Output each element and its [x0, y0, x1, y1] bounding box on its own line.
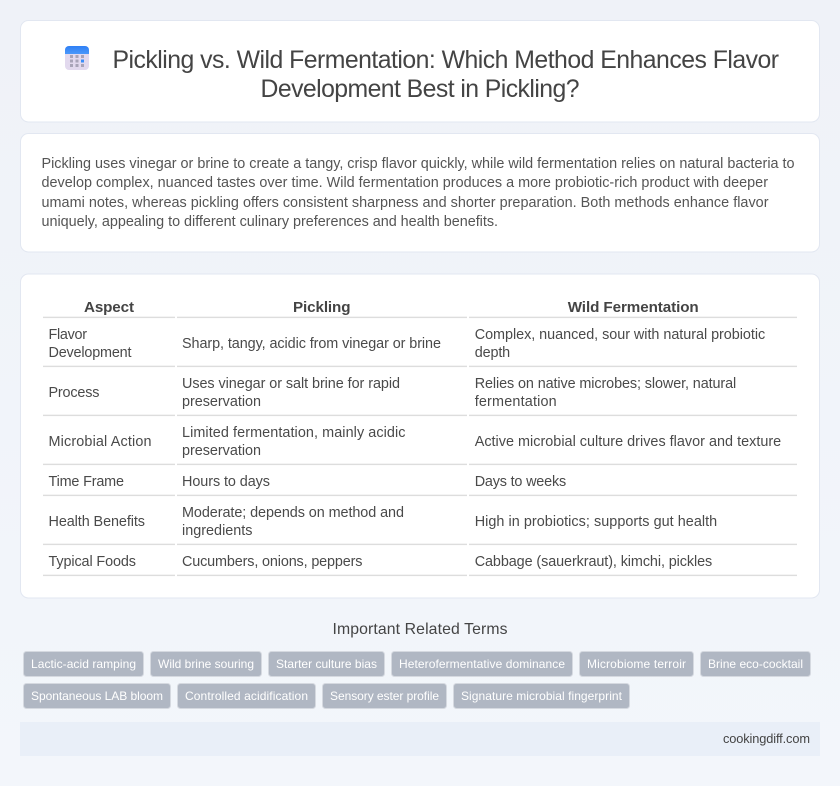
tags: related terms: Heterofermentative dominance [399, 657, 565, 671]
title: Pickling vs. Wild Fermentation: Which Method Enhances Flavor [112, 47, 779, 74]
icon: calendar [65, 46, 89, 70]
table header: Pickling [293, 299, 350, 316]
table row: flavor development: Complex, nuanced, sour with natural probiotic [475, 327, 765, 343]
table header [84, 299, 699, 316]
table row: microbial action [48, 425, 781, 459]
text block: introduction paragraph: umami notes, whereas pickling offers consistent sharpness and shorter preparation. Both methods enhance flavor [42, 195, 769, 211]
table row: typical foods: Cucumbers, onions, peppers [182, 554, 362, 570]
text block: introduction paragraph [42, 156, 794, 230]
tags: related terms: Sensory ester profile [330, 689, 439, 703]
panel: introduction [20, 134, 820, 252]
table row: process: Relies on native microbes; slower, natural [475, 376, 736, 392]
table row: flavor development: Flavor [48, 327, 87, 343]
table row: process: Process [48, 385, 100, 401]
text block: introduction paragraph: develop complex, nuanced tastes over time. Wild fermentation produces a more probiotic-rich product with deeper [42, 175, 768, 191]
table row: flavor development [48, 327, 765, 361]
footer: cookingdiff.com [723, 731, 810, 746]
table row: time frame: Hours to days [182, 474, 270, 490]
table row: time frame: Time Frame [48, 474, 124, 490]
table row: typical foods: Cabbage (sauerkraut), kimchi, pickles [475, 554, 712, 570]
table row: time frame [48, 474, 566, 490]
table header: Wild Fermentation [568, 299, 699, 316]
table header: Aspect [84, 299, 134, 316]
table row: process: fermentation [475, 394, 557, 410]
tags: related terms: Lactic-acid ramping [31, 657, 136, 671]
tags: related terms: Controlled acidification [185, 689, 308, 703]
panel: comparison table [20, 274, 820, 598]
table row: health benefits: High in probiotics; supports gut health [475, 514, 717, 530]
table row: typical foods: Typical Foods [48, 554, 136, 570]
tags: related terms: Spontaneous LAB bloom [31, 689, 163, 703]
table row: health benefits: Moderate; depends on method and [182, 505, 404, 521]
table row: flavor development: Sharp, tangy, acidic from vinegar or brine [182, 336, 441, 352]
table row: time frame: Days to weeks [475, 474, 566, 490]
table row: microbial action: Microbial Action [48, 434, 152, 450]
text block: introduction paragraph: Pickling uses vinegar or brine to create a tangy, crisp flavor quickly, while wild fermentation relies on natural bacteria to [42, 156, 794, 172]
table row: microbial action: Active microbial culture drives flavor and texture [475, 434, 781, 450]
title [112, 47, 779, 103]
table row: health benefits: ingredients [182, 523, 252, 539]
tags: related terms: Brine eco-cocktail [708, 657, 803, 671]
title: Development Best in Pickling? [260, 76, 580, 103]
tags: related terms [24, 652, 810, 708]
table row: process: Uses vinegar or salt brine for rapid [182, 376, 400, 392]
heading: important related terms: Important Related Terms [332, 621, 508, 638]
tags: related terms: Signature microbial fingerprint [461, 689, 623, 703]
table row: process: preservation [182, 394, 261, 410]
tags: related terms: Microbiome terroir [587, 657, 686, 671]
table row: microbial action: Limited fermentation, mainly acidic [182, 425, 406, 441]
table row: flavor development: depth [475, 345, 510, 361]
table row: typical foods [48, 554, 712, 570]
table row: flavor development: Development [48, 345, 132, 361]
table row: health benefits [48, 505, 717, 539]
table row: microbial action: preservation [182, 443, 261, 459]
table row: health benefits: Health Benefits [48, 514, 145, 530]
panel: title header [20, 20, 820, 122]
tags: related terms: Wild brine souring [158, 657, 254, 671]
tags: related terms: Starter culture bias [276, 657, 377, 671]
table row: process [48, 376, 736, 410]
footer [20, 722, 820, 756]
text block: introduction paragraph: uniquely, appealing to different culinary preferences and health benefits. [42, 214, 498, 230]
